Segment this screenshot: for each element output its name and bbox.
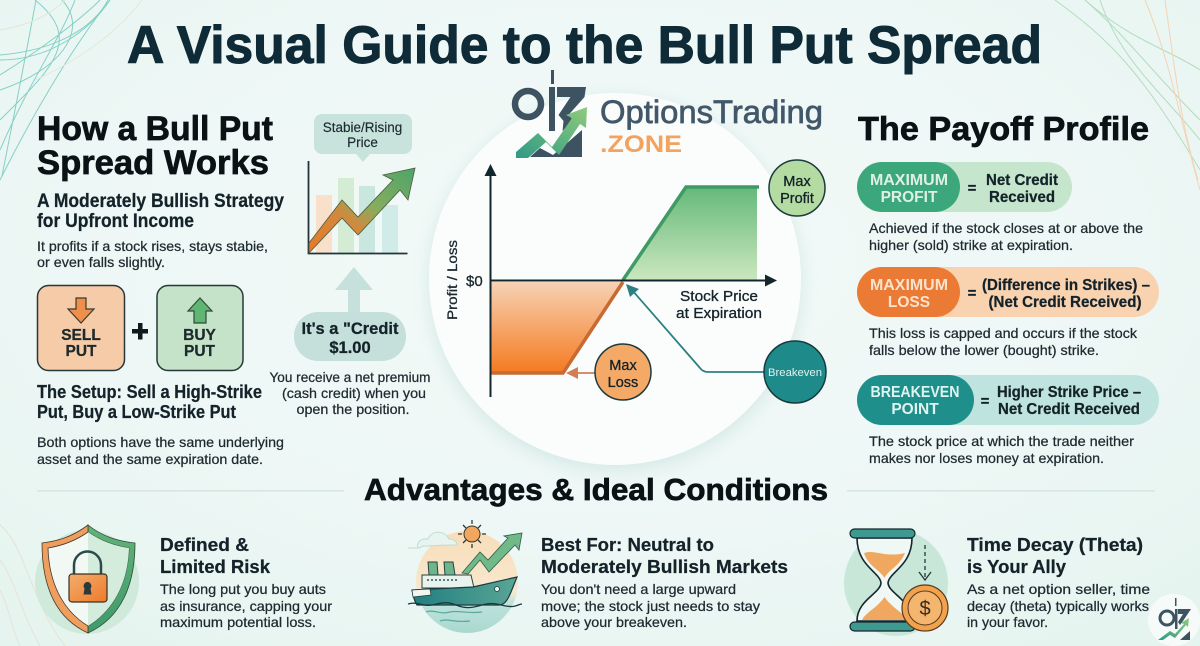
heading: best for: Best For: Neutral to [541,534,714,555]
title: A Visual Guide to the Bull Put Spread [127,16,1042,75]
heading: how it works: Spread Works [37,144,269,182]
heading: time decay: Time Decay (Theta) [967,534,1143,555]
panel: how a bull put spread works [37,110,284,467]
text: same underlying [37,434,284,467]
formula: maximum loss: (Difference in Strikes) – [982,277,1150,294]
formula: maximum profit: Received [989,189,1055,206]
axis label: stock price: at Expiration [676,305,762,322]
text: maximum profit note: Achieved if the stock closes at or above the [869,220,1143,236]
callout: max profit: Max [783,174,811,190]
formula: breakeven point [857,375,1159,425]
decorative wave lines: top right [1055,0,1200,170]
axis label: zero: $0 [466,273,483,290]
heading: advantages and ideal conditions: Advantages & Ideal Conditions [364,472,828,507]
text: profit conditions [37,238,268,270]
text: breakeven note: makes nor loses money at expiration. [869,450,1104,466]
text: best for: above your breakeven. [541,614,687,630]
text: best for: You don't need a large upward [541,581,736,597]
formula: maximum profit [857,162,1072,212]
subheading: strategy: for Upfront Income [37,211,194,232]
heading: defined risk [160,534,271,577]
text: defined risk: maximum potential loss. [160,614,316,630]
arrow: max loss [566,367,596,379]
text: time decay: As a net option seller, time [967,581,1150,597]
panel: payoff profile [857,110,1159,466]
text: defined risk: The long put you buy auts [160,581,326,597]
icon: shield with lock [35,525,139,634]
axis label: profit and loss: Profit / Loss [444,240,460,320]
text: same underlying: Both options have the same underlying [37,434,284,450]
heading: how it works: How a Bull Put [37,110,273,148]
text: defined risk: as insurance, capping your [160,598,332,614]
text: best for: move; the stock just needs to stay [541,598,760,614]
callout: max loss [595,344,651,400]
card: buy put [157,286,243,370]
formula: breakeven point: BREAKEVEN [870,384,960,401]
logo wordmark: OptionsTrading [600,94,823,130]
callout: stable or rising price [314,114,412,162]
formula: maximum profit: MAXIMUM [870,172,948,189]
icon: ship with rising arrow [408,520,522,633]
heading: best for: Moderately Bullish Markets [541,556,788,577]
arrow: breakeven [626,284,766,372]
formula: breakeven point: Net Credit Received [998,401,1140,418]
logo suffix: .ZONE [600,131,682,158]
panel: payoff chart circle [429,93,826,470]
callout: credit pill [294,312,406,361]
text: maximum loss note [869,325,1138,358]
text: profit conditions: or even falls slightly. [37,254,165,270]
formula: maximum loss [857,267,1159,317]
text: maximum profit note: higher (sold) strike at expiration. [869,237,1073,253]
callout: credit pill: It's a "Credit [301,320,399,338]
icon: plus [132,323,148,340]
heading: how it works [37,110,273,182]
formula: breakeven point: POINT [891,401,939,418]
icon: hourglass and coin [844,529,948,636]
text: net premium: open the position. [296,401,410,417]
text: maximum loss note: This loss is capped and occurs if the stock [869,325,1138,341]
heading: time decay: is Your Ally [967,556,1067,577]
heading: defined risk: Limited Risk [160,556,271,577]
text: maximum profit note [869,220,1143,253]
text: breakeven note: The stock price at which the trade neither [869,433,1134,449]
callout: max profit [769,160,825,216]
subheading: strategy: A Moderately Bullish Strategy [37,191,284,212]
arrow: credit to price [335,267,373,312]
heading: payoff profile: The Payoff Profile [858,110,1149,147]
callout: max profit: Profit [780,191,814,207]
formula: maximum profit: Net Credit [986,172,1058,189]
card: buy put: PUT [184,343,216,360]
callout: stable or rising price: Stabie/Rising [323,120,402,135]
logo: options trading zone [515,70,823,158]
text: defined risk [160,581,332,630]
formula: breakeven point: = [981,393,990,410]
subheading: strategy [37,191,284,232]
formula: maximum loss: (Net Credit Received) [988,294,1142,311]
formula: maximum profit: PROFIT [881,189,938,206]
text: net premium: You receive a net premium [270,369,430,385]
card: sell put: PUT [66,343,97,360]
icon: hourglass and coin: $ [919,598,931,620]
card: sell put: SELL [61,327,101,344]
text: net premium [270,369,430,417]
panel: best for [408,520,788,633]
formula: maximum loss: MAXIMUM [870,277,948,294]
card: sell put [38,286,124,370]
callout: max loss: Loss [608,375,638,391]
decorative wave lines: bottom left [0,525,65,646]
panel: time decay [844,529,1150,636]
text: maximum loss note: falls below the lower (bought) strike. [869,342,1099,358]
formula: maximum profit: = [968,180,977,197]
axis label: stock price: Stock Price [680,288,758,305]
text: the setup: Put, Buy a Low-Strike Put [37,402,236,422]
decorative wave lines: top left [0,0,110,180]
callout: credit pill: $1.00 [329,339,371,357]
callout: breakeven [764,341,826,403]
text: the setup: The Setup: Sell a High-Strike [37,382,262,402]
logo: corner badge [1148,594,1200,646]
text: time decay: decay (theta) typically works [967,598,1149,614]
formula: maximum loss: = [968,285,977,302]
text: time decay: in your favor. [967,614,1048,630]
text: best for [541,581,760,630]
text: time decay [967,581,1150,630]
heading: best for [541,534,788,577]
heading: time decay [967,534,1143,577]
chart: payoff diagram [484,164,777,397]
card: buy put: BUY [183,327,217,344]
text: same underlying: asset and the same expiration date. [37,451,263,467]
text: the setup [37,382,262,422]
callout: breakeven: Breakeven [768,367,822,379]
text: breakeven note [869,433,1134,466]
axis label: stock price [676,288,762,322]
heading: defined risk: Defined & [160,534,249,555]
callout: max loss: Max [609,358,637,374]
formula: breakeven point: Higher Strike Price – [997,384,1141,401]
text: profit conditions: It profits if a stock rises, stays stabie, [37,238,268,254]
chart: rising price [308,161,415,254]
callout: stable or rising price: Price [347,135,378,150]
text: net premium: (cash credit) when you [282,385,426,401]
panel: defined and limited risk [35,525,332,634]
formula: maximum loss: LOSS [888,294,930,311]
